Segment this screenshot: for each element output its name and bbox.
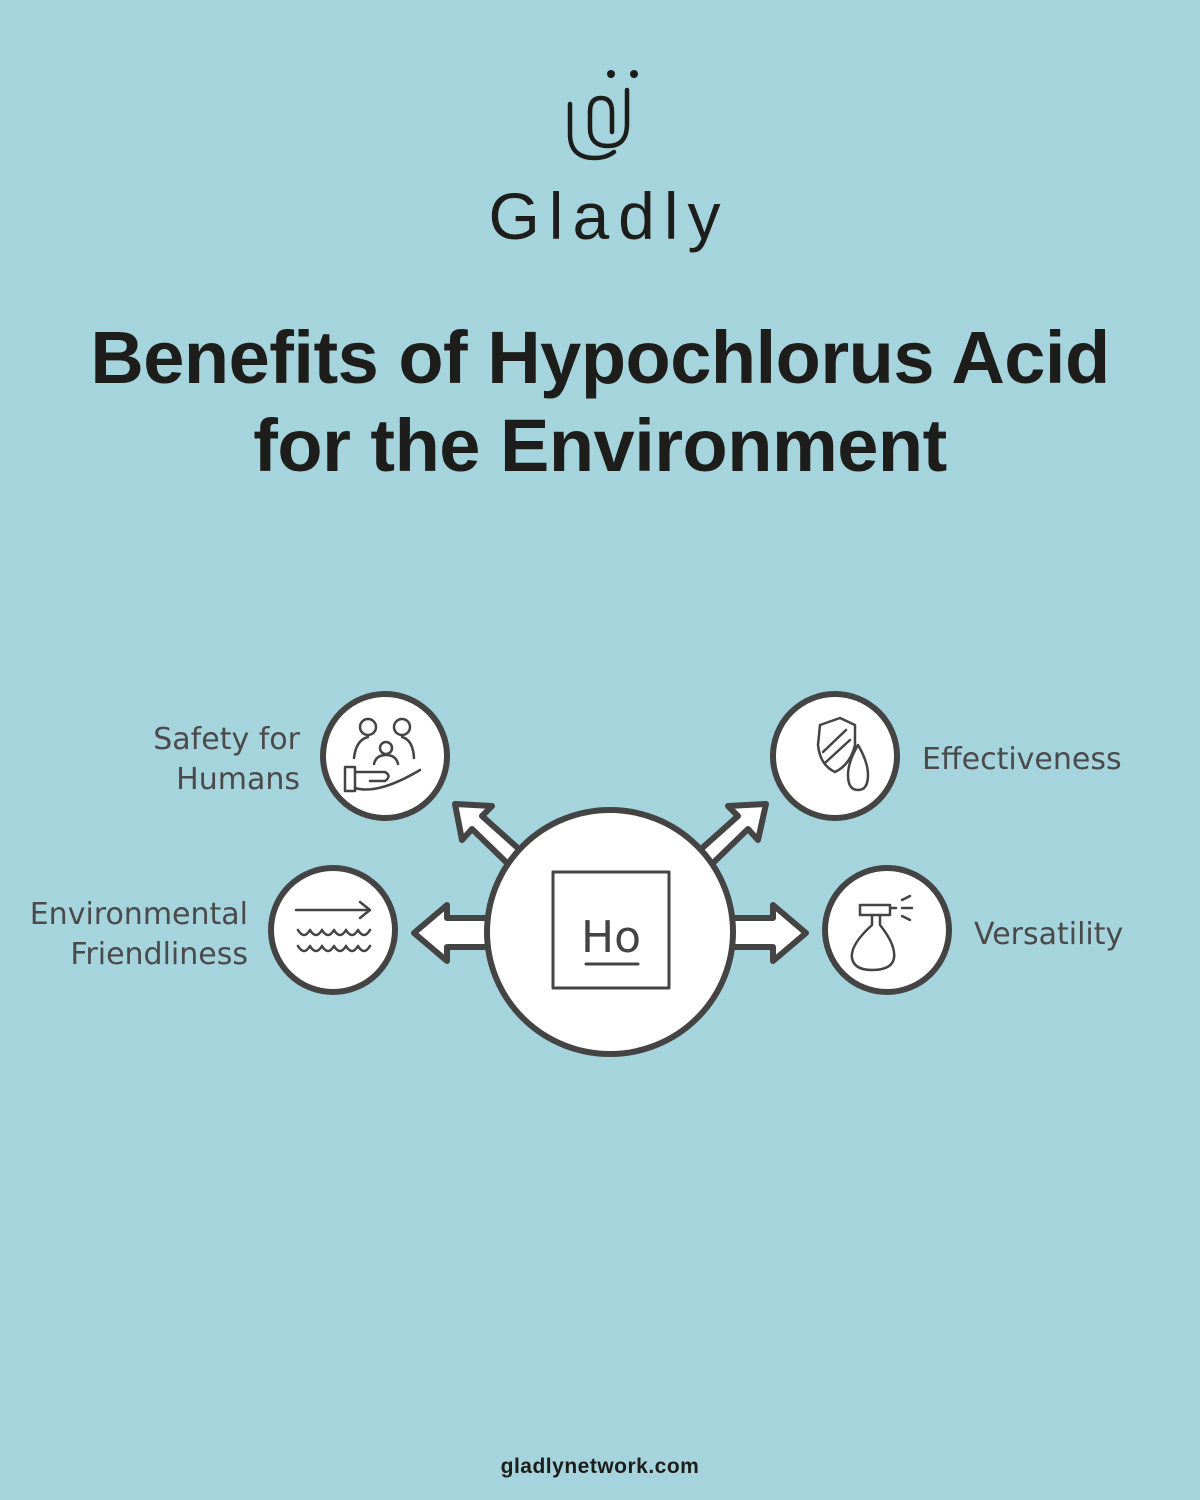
label: safety for humans xyxy=(153,722,300,797)
diagram xyxy=(268,691,952,1057)
label: safety for humans: Humans xyxy=(176,762,300,797)
logo icon xyxy=(568,70,638,160)
title: Benefits of Hypochlorus Acid xyxy=(90,316,1110,399)
label: effectiveness: Effectiveness xyxy=(922,742,1122,777)
central circle xyxy=(487,810,733,1054)
central circle: Ho xyxy=(581,912,641,963)
arrow: upper-right xyxy=(700,804,766,864)
label: versatility: Versatility xyxy=(974,917,1123,952)
label: safety for humans: Safety for xyxy=(153,722,300,757)
icon: safety for humans xyxy=(323,694,447,818)
arrow: right xyxy=(720,905,806,961)
icon: versatility spray bottle xyxy=(825,868,949,992)
icon: effectiveness xyxy=(773,694,897,818)
label: environmental friendliness: Friendliness xyxy=(70,937,248,972)
footer: gladlynetwork.com xyxy=(501,1455,699,1478)
title: for the Environment xyxy=(253,404,947,487)
arrow: left xyxy=(414,905,500,961)
label: environmental friendliness xyxy=(30,897,248,972)
logo wordmark: Gladly xyxy=(488,179,730,253)
icon: environmental friendliness xyxy=(271,868,395,992)
title xyxy=(90,316,1110,487)
label: environmental friendliness: Environmental xyxy=(30,897,248,932)
arrow: upper-left xyxy=(455,804,520,864)
